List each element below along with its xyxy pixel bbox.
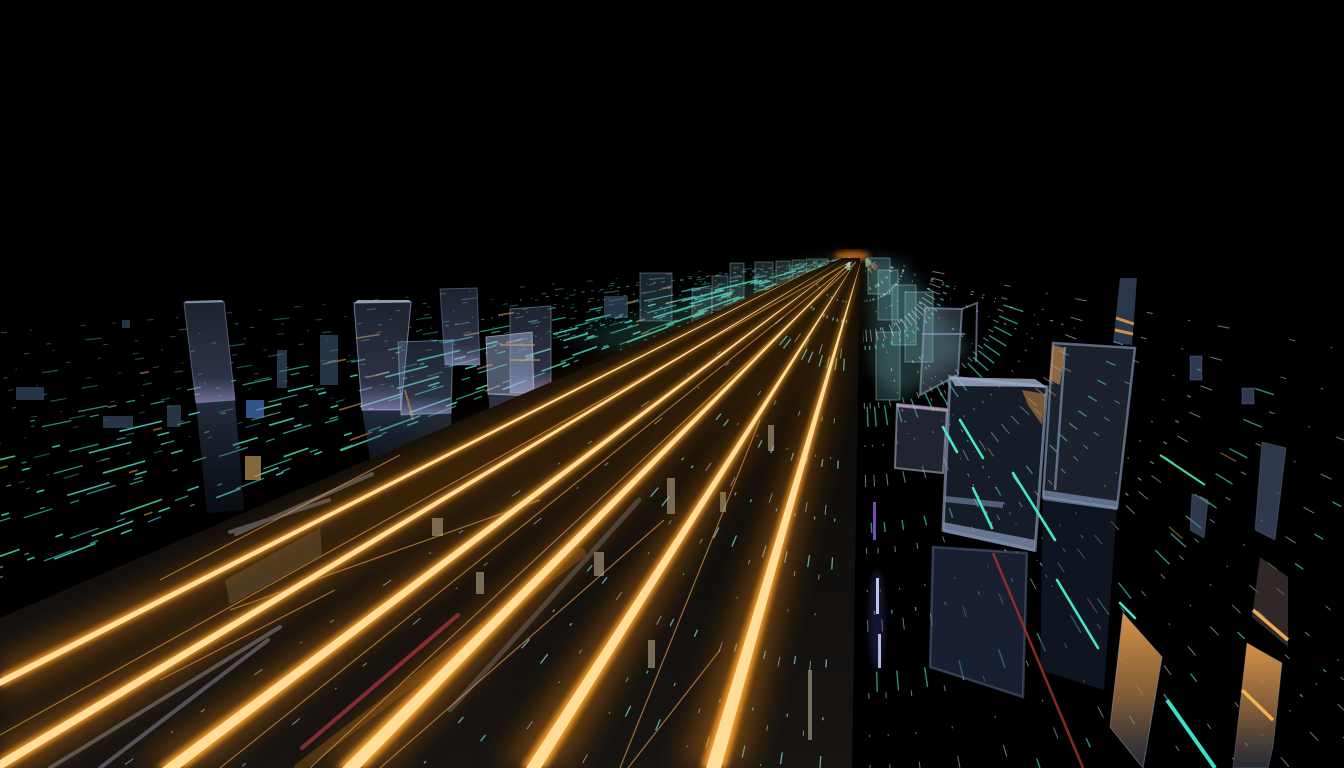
amber glass panel: bottom right lower (1233, 643, 1282, 768)
glass tower: left group (354, 288, 554, 490)
beam 1 (0, 258, 835, 686)
distant block row: left (640, 259, 828, 322)
glass tower: tall right (1040, 343, 1135, 690)
scene: light highway through a glass data city (0, 249, 1344, 768)
teal strip upper right (1160, 455, 1205, 485)
beam 5 (526, 258, 858, 768)
amber panel left (245, 456, 261, 480)
left city tiny panels (16, 296, 628, 428)
glass tower: slim far right (1113, 278, 1137, 345)
amber streaks on panels (1242, 610, 1288, 720)
distant block row: right (868, 258, 933, 400)
bright teal light strips right (943, 420, 1135, 648)
light beams core (0, 258, 862, 768)
horizon glow (834, 251, 870, 261)
light beams soft edge (0, 258, 862, 768)
right city data dashes (862, 258, 1344, 768)
highway surface (0, 258, 860, 768)
far particle haze: right (868, 258, 970, 400)
beam 6 (706, 258, 862, 768)
beam 4 (342, 258, 855, 768)
road data dashes (120, 262, 850, 768)
narrow panels right (1190, 356, 1286, 540)
beam 3 (162, 258, 850, 768)
road small panels (432, 425, 812, 740)
far particle haze: left (560, 258, 850, 350)
blue panel left (246, 400, 264, 418)
glass tower: right small front (895, 405, 947, 473)
glass tower: right small back (920, 303, 977, 395)
amber glass panel: bottom right upper (1252, 557, 1288, 647)
left city data dashes (0, 258, 850, 606)
data texture patch on road (225, 528, 322, 605)
glow bulb and violet streak near road edge (869, 502, 885, 670)
beam 2 (0, 258, 845, 768)
large teal strip bottom right (1167, 700, 1215, 768)
glass tower: large front right (930, 377, 1047, 697)
glass tower: far left (184, 300, 244, 513)
red line right (993, 553, 1083, 768)
light beams halo (0, 258, 862, 768)
road streaks: white and grey (50, 474, 639, 768)
amber glass panel: bottom centre-right (1110, 613, 1162, 768)
thin amber road lines (0, 262, 856, 768)
